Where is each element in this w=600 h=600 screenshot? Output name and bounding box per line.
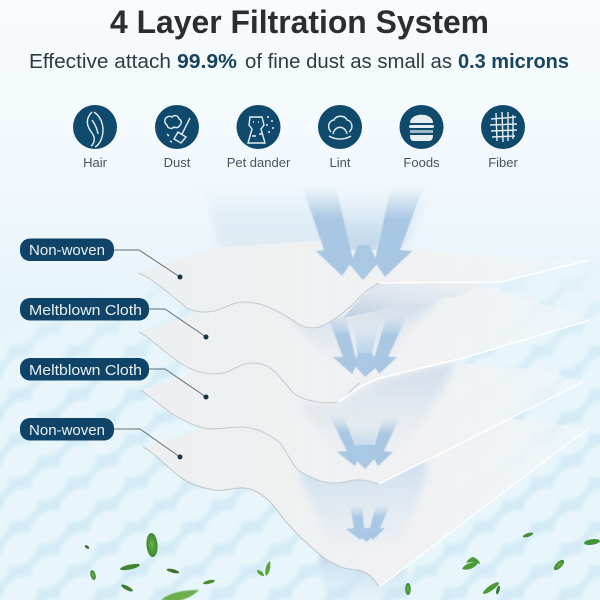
icon: lint	[318, 105, 362, 170]
quilted filter texture	[0, 299, 600, 600]
leaf small	[84, 544, 90, 550]
layer 1 front edge	[138, 273, 379, 328]
layer 3 sheet	[141, 363, 583, 484]
callout: non-woven 2	[20, 418, 182, 460]
air shadow on layer 4	[298, 460, 428, 545]
label: lint: Lint	[330, 155, 351, 170]
label: pet dander: Pet dander	[227, 155, 291, 170]
leaf blurred bottom	[161, 590, 199, 600]
subtitle: of fine dust as small as	[245, 51, 452, 73]
subtitle: Effective attach	[29, 51, 171, 73]
layer 1 sheet	[138, 240, 590, 328]
leaf pair	[257, 561, 270, 576]
layer 4 right edge	[379, 428, 590, 587]
icon: dust	[155, 105, 199, 170]
callout: meltblown cloth 1: Meltblown Cloth	[29, 302, 142, 319]
layer 2 right edge	[339, 320, 590, 402]
arrows through layer 4	[346, 505, 390, 542]
layer 3 front edge	[141, 390, 379, 484]
callout: non-woven 1	[20, 238, 182, 280]
arrows through layer 1	[303, 188, 423, 280]
icon: pet dander	[227, 105, 291, 170]
callout: meltblown cloth 2: Meltblown Cloth	[29, 362, 142, 379]
callout: non-woven 2: Non-woven	[29, 422, 105, 439]
callout: non-woven 1: Non-woven	[29, 242, 105, 259]
layer 2 front edge	[139, 332, 360, 403]
leaf large	[146, 533, 158, 557]
layer 1 right edge	[379, 260, 590, 283]
layer 4 front edge	[143, 447, 379, 587]
bottom air stream	[318, 550, 408, 600]
layer 4 sheet	[143, 418, 590, 587]
air shadow on layer 3	[300, 362, 455, 465]
label: fiber: Fiber	[488, 155, 518, 170]
subtitle	[29, 51, 569, 73]
title: 4 Layer Filtration System	[110, 4, 489, 40]
icon: foods	[400, 105, 444, 170]
air stream fan	[205, 185, 432, 262]
icon: hair	[73, 105, 117, 170]
subtitle: 99.9%	[177, 51, 237, 73]
callout: meltblown cloth 1	[20, 298, 208, 340]
label: hair: Hair	[83, 155, 108, 170]
label: foods: Foods	[403, 155, 440, 170]
callout: meltblown cloth 2	[20, 358, 208, 400]
layer 1 underside fold	[343, 283, 487, 318]
layer 3 right edge	[379, 382, 583, 484]
label: dust: Dust	[164, 155, 191, 170]
leaves	[84, 532, 600, 600]
center arrow	[350, 245, 378, 280]
icon: fiber	[481, 105, 525, 170]
arrows through layer 2	[328, 315, 407, 377]
subtitle: 0.3 microns	[458, 51, 569, 73]
leaf cluster	[462, 557, 480, 570]
right arrow	[375, 188, 423, 277]
layer 2 sheet	[139, 287, 590, 403]
center arrow shaft	[338, 195, 390, 250]
arrows through layer 3	[330, 415, 400, 469]
air shadow on layer 2	[280, 300, 440, 370]
left arrow	[303, 188, 353, 276]
